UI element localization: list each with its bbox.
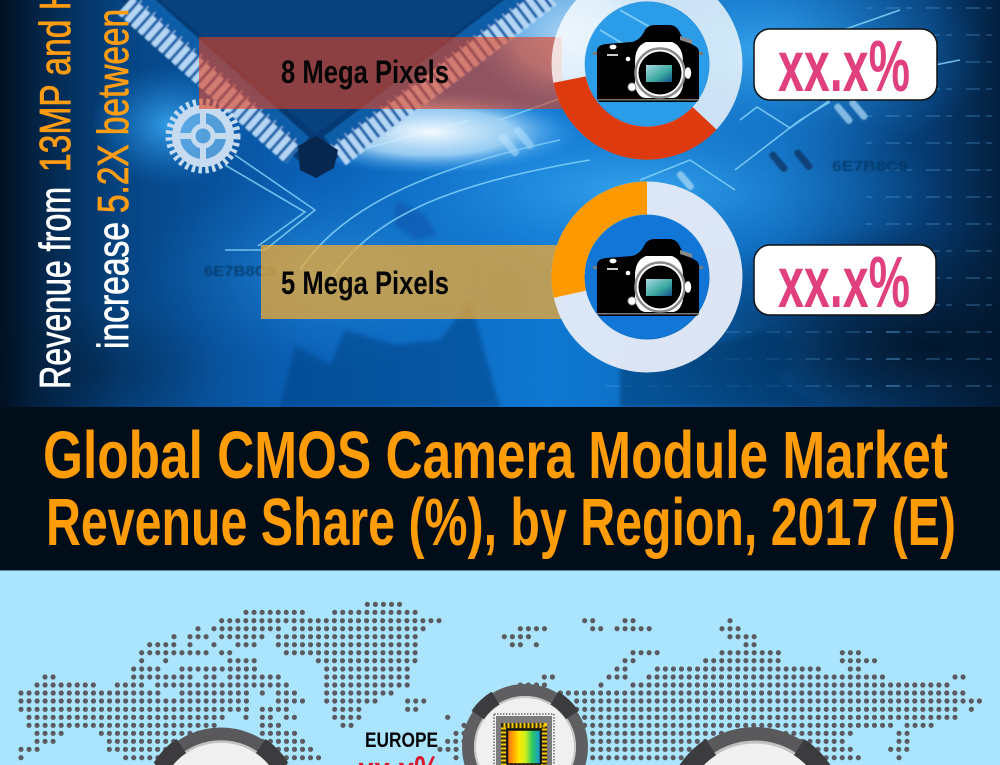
bar: 8 mega pixels	[199, 37, 562, 109]
donut: 5 mega pixels share	[568, 198, 726, 356]
region badge: right	[674, 734, 836, 765]
callout: 8 MP value: xx.x%	[778, 27, 910, 107]
dark gear silhouettes	[280, 200, 820, 407]
callout: 5 MP value	[754, 243, 936, 323]
bar: 5 mega pixels: 5 Mega Pixels	[281, 265, 449, 301]
callout: 5 MP value: xx.x%	[778, 243, 910, 323]
side text: revenue statement: increase	[89, 222, 138, 349]
microchip	[120, 0, 549, 178]
icon: image sensor chip	[494, 714, 554, 765]
donut: 8 mega pixels share	[568, 0, 726, 143]
icon: camera 2	[593, 239, 703, 316]
side text: revenue statement: Revenue from	[31, 187, 80, 389]
dotted world map	[21, 604, 980, 758]
map panel background	[0, 570, 1000, 765]
gear	[169, 102, 237, 170]
icon: camera 1	[593, 25, 703, 102]
region badge: centre chip	[468, 690, 582, 765]
region badge: left	[150, 734, 292, 765]
side text: revenue statement	[38, 0, 129, 387]
glow behind chip corner	[336, 96, 568, 171]
background code text: 6E7B8C9	[204, 263, 276, 280]
title band	[0, 407, 1000, 570]
background code text	[204, 158, 908, 280]
callout: 8 MP value	[754, 27, 937, 107]
background: circuit board panel	[2, 0, 1000, 407]
bar: 5 mega pixels	[261, 245, 561, 319]
region label: Europe: EUROPE	[365, 729, 438, 752]
circuit traces	[225, 10, 960, 280]
region label: Europe	[358, 732, 438, 765]
bar: 8 mega pixels: 8 Mega Pixels	[281, 54, 449, 90]
electronic components	[498, 98, 869, 191]
background code text: 6E7B8C9	[832, 158, 908, 175]
